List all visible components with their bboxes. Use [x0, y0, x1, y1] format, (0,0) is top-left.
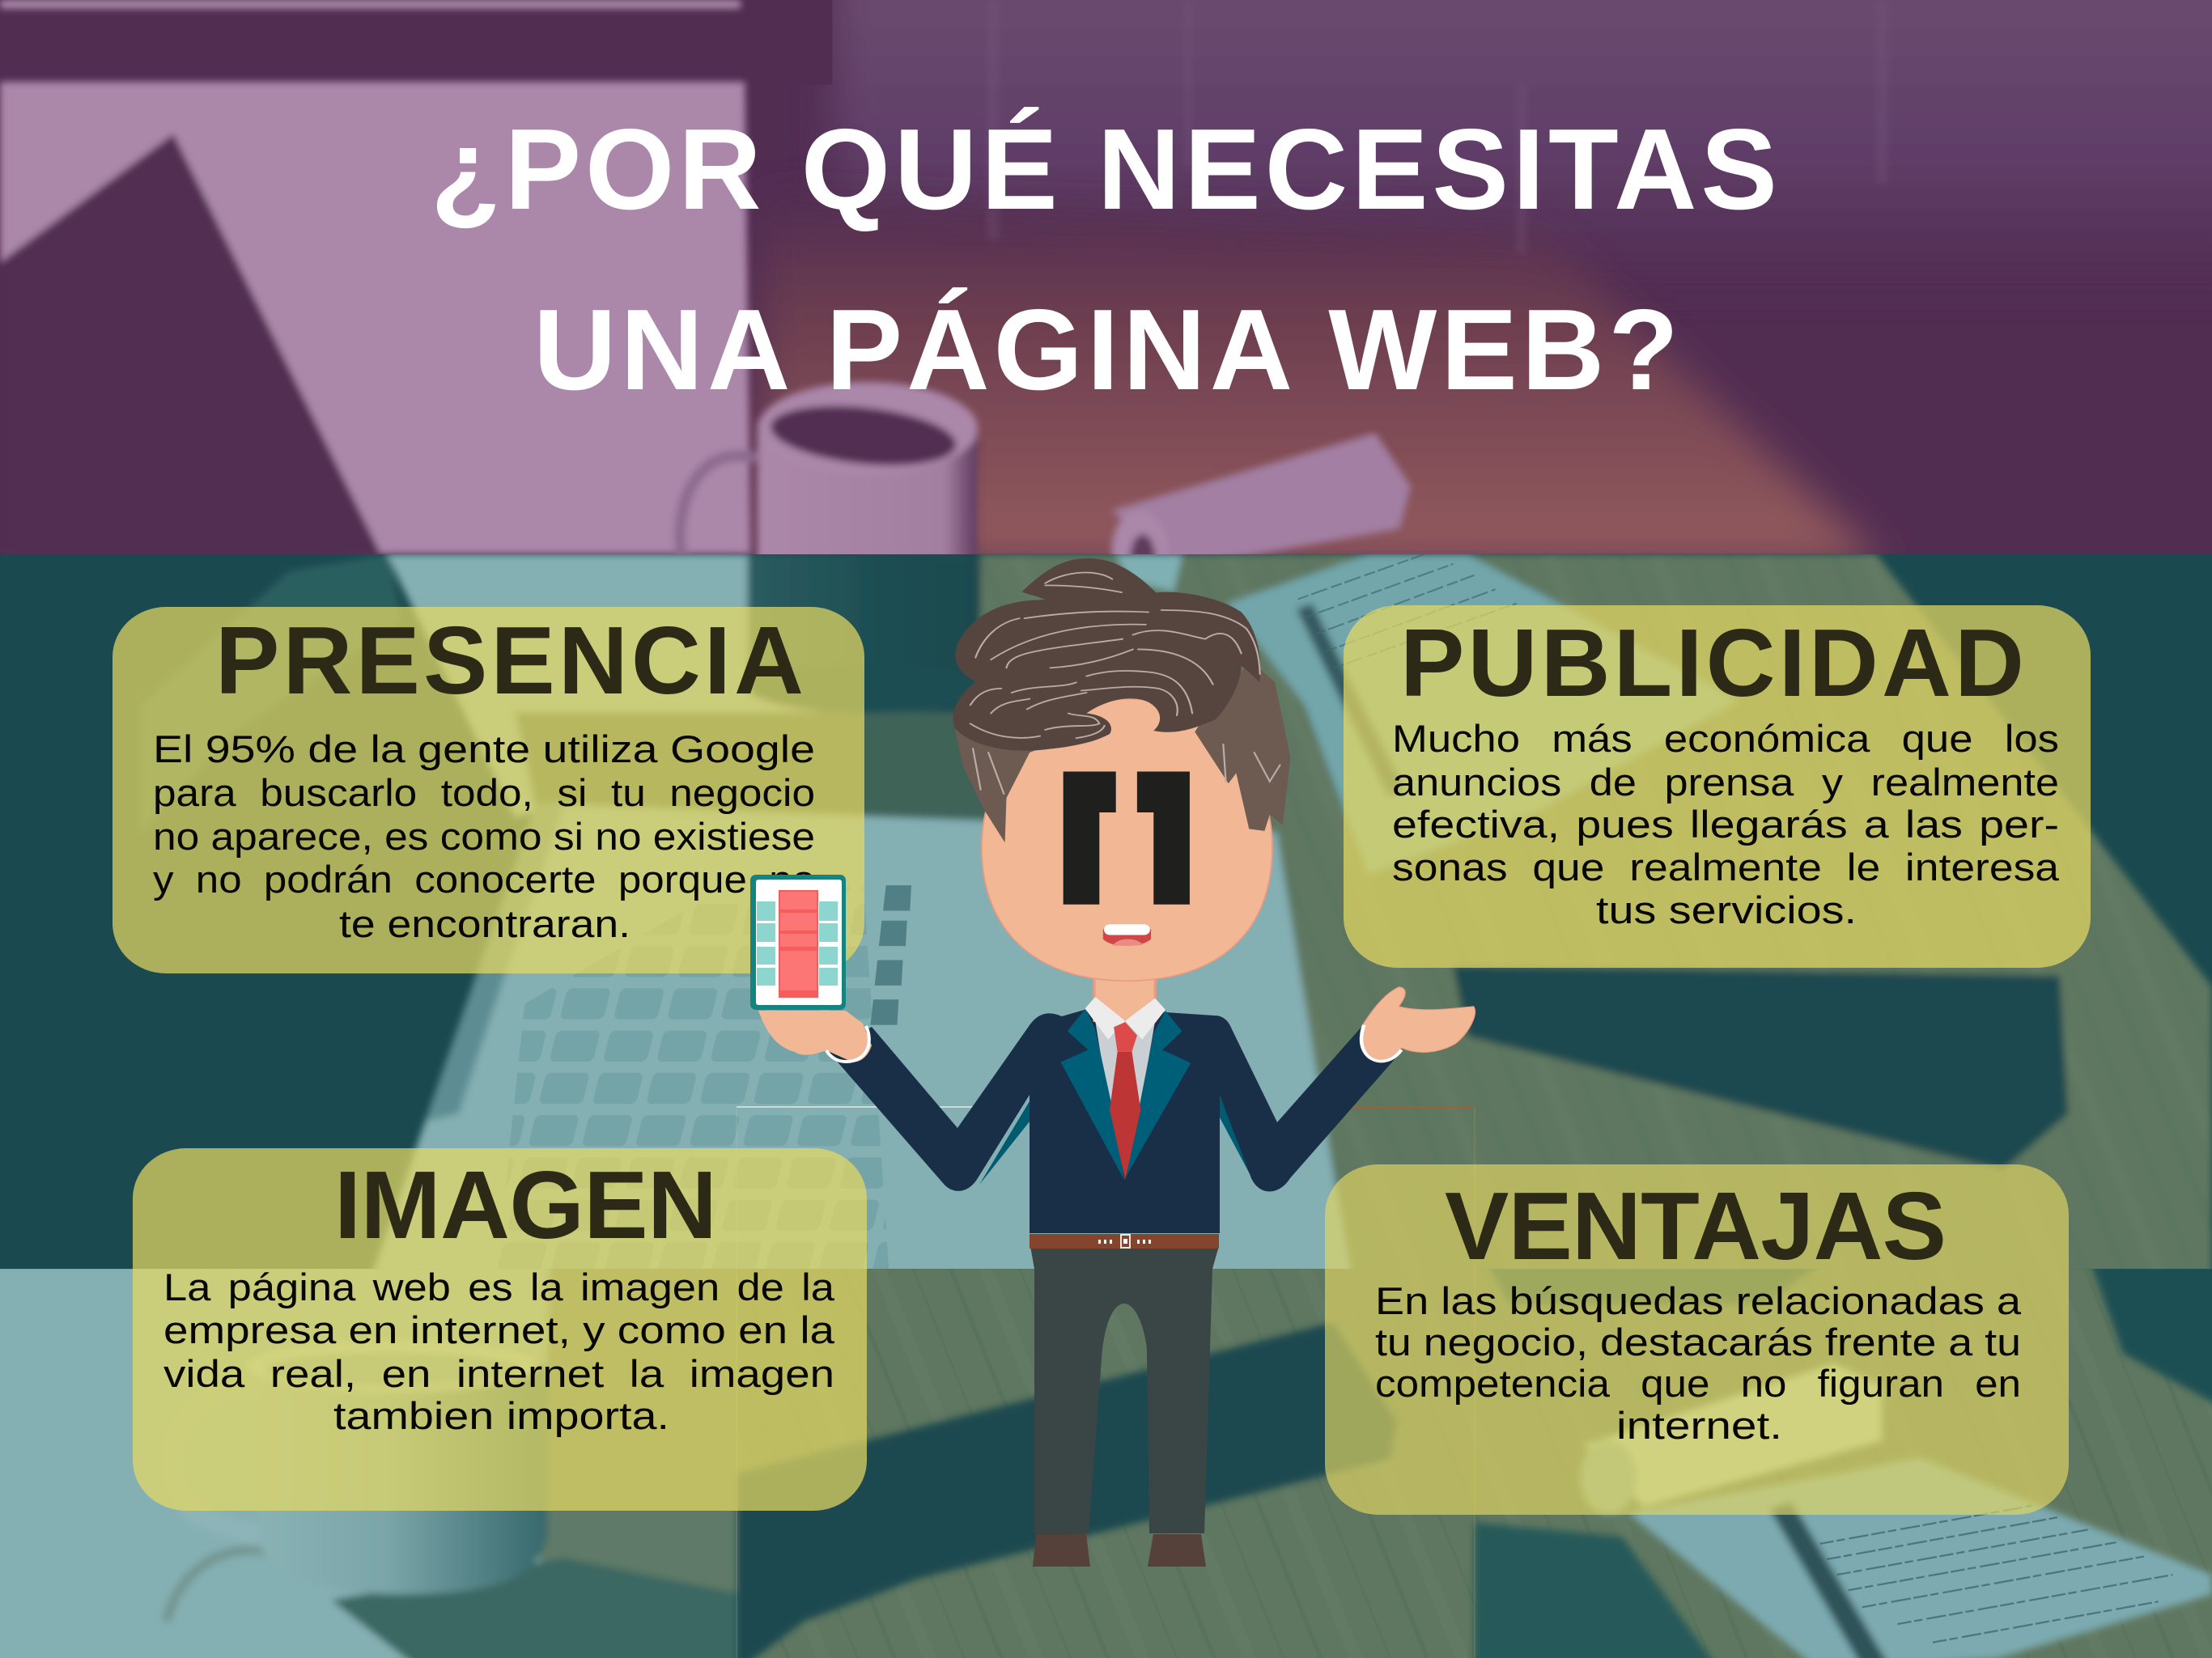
text: imagen: vida real, en internet la imagen [163, 1352, 834, 1395]
character: businessman with phone [750, 558, 1475, 1567]
head [982, 699, 1272, 981]
text: publicidad: efectiva, pues llegarás a las per- [1392, 803, 2059, 846]
text: presencia: para buscarlo todo, si tu negocio [153, 771, 815, 814]
shirt [1095, 1021, 1155, 1169]
jacket and arms [829, 1007, 1401, 1233]
phone [750, 875, 846, 1010]
right cuff [1361, 1025, 1401, 1062]
neck [1094, 976, 1155, 1021]
text: publicidad: sonas que realmente le interesa [1392, 846, 2060, 888]
panel: publicidad [1344, 605, 2091, 968]
upper body and head [953, 558, 1475, 1180]
shoes [1033, 1534, 1206, 1567]
top hair [953, 558, 1260, 751]
eyes [1064, 771, 1190, 905]
tie [1110, 1022, 1140, 1180]
background photo: purple duotone upper band [0, 0, 2212, 606]
text: publicidad: anuncios de prensa y realmente [1392, 761, 2059, 804]
heading: presencia: PRESENCIA [215, 607, 804, 715]
belt [1030, 1234, 1219, 1249]
text: presencia: no aparece, es como si no existiese [153, 815, 815, 858]
arm shadows [979, 1095, 1255, 1185]
mouth [1103, 924, 1151, 946]
title: UNA PÁGINA WEB? [533, 286, 1679, 414]
text: presencia: y no podrán conocerte porque no [153, 858, 815, 901]
background photo: teal duotone lower band [0, 1255, 2212, 1658]
title [431, 105, 1777, 414]
background photo: teal duotone middle band [248, 553, 2212, 1269]
left hand [758, 1011, 872, 1062]
left cuff [826, 1026, 869, 1062]
heading: publicidad: PUBLICIDAD [1400, 609, 2024, 717]
text: presencia: El 95% de la gente utiliza Google [153, 727, 815, 770]
text: imagen: empresa en internet, y como en la [163, 1308, 835, 1351]
lapels [1060, 1008, 1191, 1180]
panel: ventajas [1325, 1164, 2069, 1515]
text: ventajas: En las búsquedas relacionadas a [1375, 1279, 2022, 1322]
text: imagen: tambien importa. [333, 1394, 669, 1437]
text: presencia [153, 727, 815, 945]
heading: imagen: IMAGEN [334, 1151, 717, 1259]
text: publicidad: Mucho más económica que los [1392, 717, 2059, 760]
panel: imagen [133, 1148, 867, 1511]
hair highlights [970, 573, 1280, 794]
text: ventajas [1375, 1279, 2022, 1447]
panel: presencia [113, 607, 864, 973]
hair fringe strands [957, 690, 1290, 842]
text: ventajas: internet. [1616, 1404, 1782, 1447]
text: publicidad: tus servicios. [1596, 888, 1857, 931]
legs and trousers [1030, 1246, 1219, 1533]
heading: ventajas: VENTAJAS [1445, 1172, 1947, 1280]
title: ¿POR QUÉ NECESITAS [431, 105, 1777, 234]
collar [1085, 997, 1165, 1040]
right hand [1361, 987, 1475, 1061]
text: publicidad [1392, 717, 2060, 931]
text: imagen: La página web es la imagen de la [163, 1266, 835, 1308]
text: ventajas: competencia que no figuran en [1375, 1362, 2021, 1405]
text: ventajas: tu negocio, destacarás frente a tu [1375, 1321, 2021, 1363]
back hair [953, 662, 1290, 842]
text: imagen [163, 1266, 835, 1437]
text: presencia: te encontraran. [339, 902, 630, 945]
